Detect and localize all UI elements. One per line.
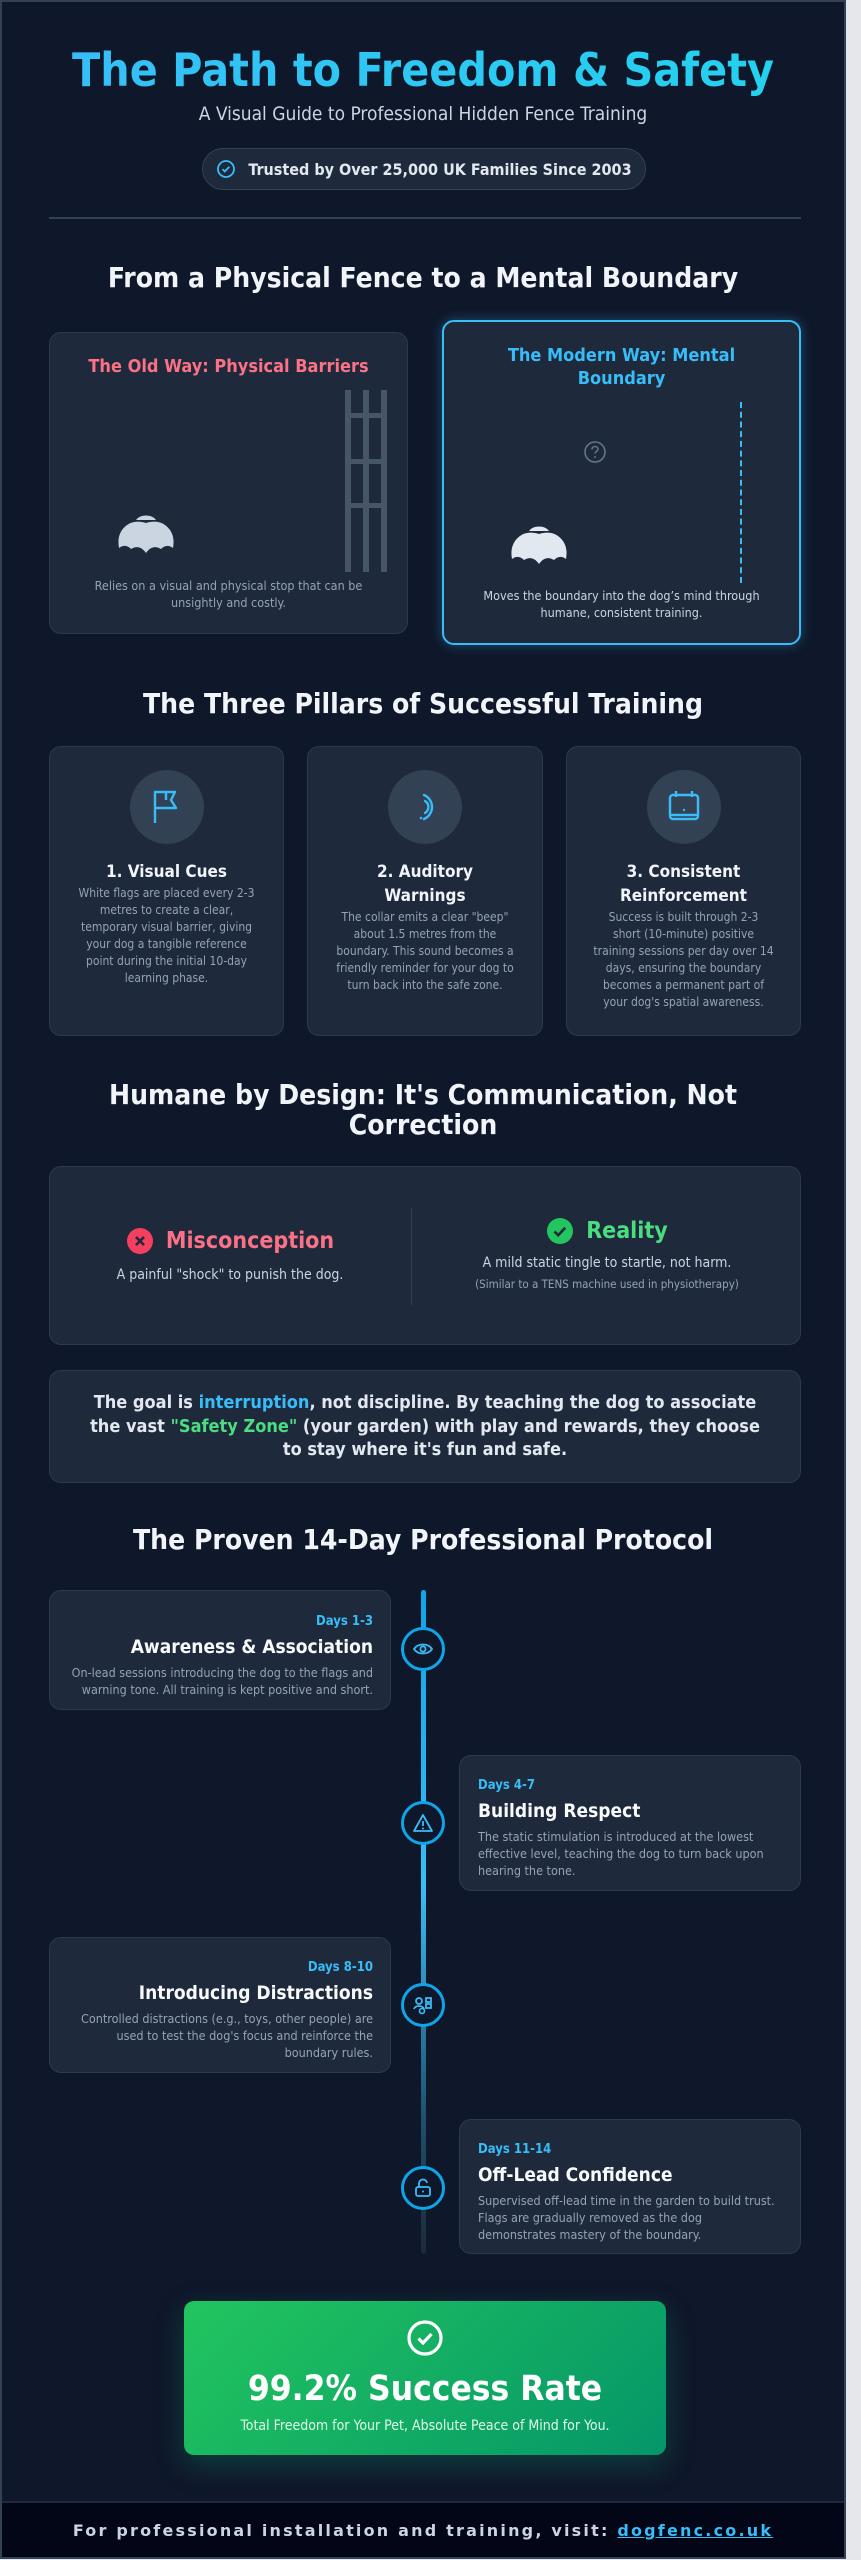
- panel: pillar auditory: [307, 746, 543, 1036]
- title: The Path to Freedom & Safety: [72, 43, 774, 97]
- modern heading: The Modern Way: Mental: [508, 345, 735, 366]
- pillar 3 text: Reinforcement: [620, 886, 747, 906]
- misconception column: A painful "shock" to punish the dog.: [117, 1267, 343, 1283]
- dashed boundary: [740, 402, 742, 583]
- reality heading: Reality: [586, 1218, 668, 1244]
- timeline step 4: Supervised off-lead time in the garden to build trust.: [478, 2193, 775, 2208]
- heading: humane by design: Humane by Design: It's Communication, Not: [109, 1078, 737, 1111]
- success rate panel: [184, 2301, 666, 2455]
- pillar 1 text: temporary visual barrier, giving: [81, 920, 252, 934]
- timeline step 2: Building Respect: [478, 1800, 640, 1822]
- pillar 1 text: learning phase.: [125, 971, 208, 985]
- icon: fence: [345, 390, 387, 572]
- success headline: 99.2% Success Rate: [248, 2369, 602, 2409]
- heading: physical to mental: From a Physical Fence to a Mental Boundary: [108, 261, 738, 294]
- timeline step 1: On-lead sessions introducing the dog to the flags and: [72, 1665, 373, 1680]
- heading: humane by design: Correction: [349, 1108, 497, 1141]
- footer: For professional installation and training, visit: dogfenc.co.uk: [73, 2521, 773, 2540]
- timeline step 1: Awareness & Association: [131, 1636, 373, 1658]
- pillar 1 text: metres to create a clear,: [100, 903, 233, 917]
- old way heading: The Old Way: Physical Barriers: [88, 356, 369, 377]
- modern description: Moves the boundary into the dog’s mind through: [483, 588, 760, 603]
- pillar 3 text: your dog's spatial awareness.: [603, 995, 764, 1009]
- pillar 2 text: [336, 862, 514, 992]
- modern heading: [508, 345, 735, 389]
- icon: sound: [388, 770, 462, 844]
- trust badge: Trusted by Over 25,000 UK Families Since 2003: [248, 160, 632, 178]
- icon: dog: [118, 516, 174, 553]
- heading: 14-day protocol: The Proven 14-Day Professional Protocol: [133, 1523, 713, 1556]
- pillar 3 text: days, ensuring the boundary: [606, 961, 761, 975]
- icon: check circle: [407, 2320, 443, 2356]
- timeline step 4: Off-Lead Confidence: [478, 2164, 673, 2186]
- timeline step 2: effective level, teaching the dog to turn back upon: [478, 1846, 764, 1861]
- icon: question: [584, 441, 606, 463]
- pillar 2 text: friendly reminder for your dog to: [336, 961, 514, 975]
- timeline step 2: [459, 1755, 801, 1891]
- pillar 2 text: The collar emits a clear "beep": [342, 910, 508, 924]
- misconception column: [116, 1228, 343, 1283]
- trust badge: [202, 148, 646, 190]
- pillar 1 text: your dog a tangible reference: [86, 937, 247, 951]
- pillar 1 text: 1. Visual Cues: [106, 862, 227, 882]
- misconception heading: Misconception: [166, 1228, 334, 1254]
- icon: flag: [130, 770, 204, 844]
- timeline step 4: [459, 2119, 801, 2254]
- timeline step 3: [49, 1937, 391, 2073]
- modern description: humane, consistent training.: [541, 605, 702, 620]
- icon: calendar: [647, 770, 721, 844]
- icon: check badge: [217, 160, 235, 178]
- timeline step 2: The static stimulation is introduced at the lowest: [478, 1829, 753, 1844]
- timeline step 3: boundary rules.: [285, 2045, 373, 2060]
- timeline step 3: Introducing Distractions: [139, 1982, 373, 2004]
- timeline step 1: Days 1-3: [316, 1614, 373, 1629]
- pillar 3 text: short (10-minute) positive: [613, 927, 754, 941]
- pillar 2 text: 2. Auditory: [377, 862, 473, 882]
- footer: [2, 2501, 844, 2560]
- pillar 1 text: [78, 862, 254, 985]
- reality column: [475, 1218, 739, 1291]
- success subtitle: Total Freedom for Your Pet, Absolute Peace of Mind for You.: [240, 2418, 610, 2434]
- panel: old way: [49, 332, 408, 634]
- pillar 3 text: [593, 862, 774, 1009]
- icon: dog: [511, 526, 566, 564]
- pillar 3 text: 3. Consistent: [627, 862, 740, 882]
- icon: distractions node: [401, 1983, 445, 2027]
- panel: pillar reinforcement: [566, 746, 801, 1036]
- pillar 3 text: training sessions per day over 14: [593, 944, 774, 958]
- callout: goal statement: [49, 1370, 801, 1483]
- old way description: Relies on a visual and physical stop that can be: [95, 578, 362, 593]
- panel: modern way: [442, 320, 801, 645]
- pillar 2 text: boundary. This sound becomes a: [336, 944, 514, 958]
- timeline step 4: demonstrates mastery of the boundary.: [478, 2227, 701, 2242]
- pillar 3 text: Success is built through 2-3: [609, 910, 758, 924]
- reality column: (Similar to a TENS machine used in physiotherapy): [475, 1277, 739, 1291]
- timeline step 3: Controlled distractions (e.g., toys, other people) are: [81, 2011, 373, 2026]
- pillar 1 text: point during the initial 10-day: [86, 954, 247, 968]
- pillar 2 text: Warnings: [384, 886, 466, 906]
- timeline line: [421, 1590, 426, 2254]
- timeline step 2: Days 4-7: [478, 1778, 535, 1793]
- timeline step 4: Flags are gradually removed as the dog: [478, 2210, 702, 2225]
- modern description: [483, 588, 760, 620]
- pillar 2 text: turn back into the safe zone.: [347, 978, 503, 992]
- heading: three pillars: The Three Pillars of Successful Training: [143, 687, 703, 720]
- pillar 2 text: about 1.5 metres from the: [354, 927, 496, 941]
- callout: goal statement: The goal is interruption, not discipline. By teaching the dog to associate: [94, 1392, 756, 1413]
- panel: pillar visual cues: [49, 746, 284, 1036]
- timeline step 1: warning tone. All training is kept positive and short.: [82, 1682, 373, 1697]
- reality column: A mild static tingle to startle, not harm.: [483, 1255, 731, 1271]
- heading: humane by design: [109, 1078, 737, 1141]
- modern heading: Boundary: [578, 368, 665, 389]
- pillar 3 text: becomes a permanent part of: [603, 978, 764, 992]
- timeline step 2: hearing the tone.: [478, 1863, 575, 1878]
- timeline step 4: Days 11-14: [478, 2142, 551, 2157]
- old way description: unsightly and costly.: [171, 595, 286, 610]
- timeline step 3: Days 8-10: [308, 1960, 373, 1975]
- icon: eye node: [401, 1627, 445, 1671]
- panel: misconception vs reality: [49, 1166, 801, 1345]
- icon: warning node: [401, 1801, 445, 1845]
- pillar 1 text: White flags are placed every 2-3: [79, 886, 254, 900]
- timeline step 3: used to test the dog's focus and reinforce the: [116, 2028, 373, 2043]
- timeline step 1: [49, 1590, 391, 1710]
- reality heading: [547, 1218, 668, 1244]
- old way description: [95, 578, 362, 610]
- subtitle: A Visual Guide to Professional Hidden Fence Training: [199, 103, 647, 125]
- icon: unlock node: [401, 2166, 445, 2210]
- callout: goal statement: the vast "Safety Zone" (your garden) with play and rewards, they choose: [90, 1416, 760, 1436]
- callout: goal statement: to stay where it's fun and safe.: [283, 1439, 567, 1460]
